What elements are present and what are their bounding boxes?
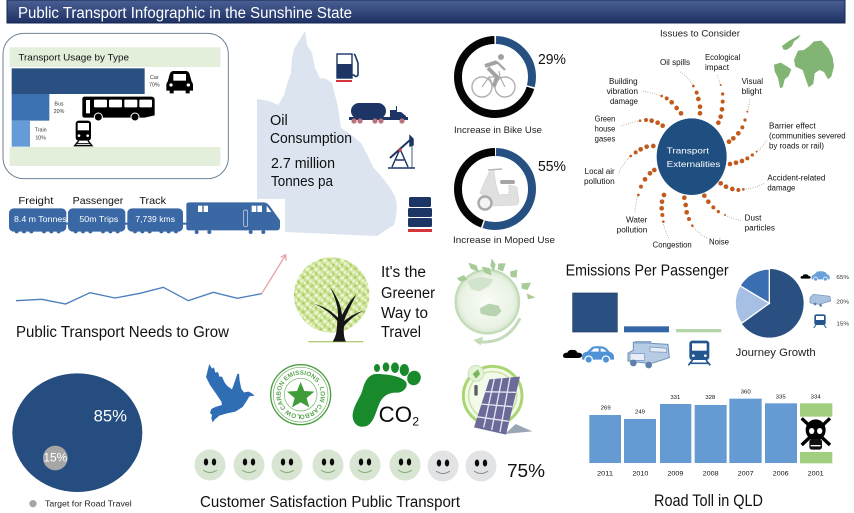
spoke labels: Congestion [653,241,692,250]
icon: legend bus [810,294,831,307]
icon: tanker truck [349,103,408,124]
chart: journey growth pie [735,269,849,359]
spoke labels: Dust [745,213,762,222]
chart: road toll bars [589,390,832,478]
title banner: Public Transport Infographic in the Sunshine State [18,5,352,22]
chart: moped use donut [453,152,566,246]
chart: public transport growth line [16,255,286,304]
spoke labels: Noise [709,237,730,246]
chart: road toll bars: 2009 [667,471,684,478]
chart: moped use donut: Increase in Moped Use [453,235,555,246]
icon: locomotive [186,202,280,234]
heading: customer satisfaction: Customer Satisfaction Public Transport [200,494,461,511]
chart: road toll bars: 2001 [808,471,824,478]
icon: moped [478,169,519,210]
hub circle: Externalities [667,159,721,169]
text: greener way to travel: Way to [381,305,428,322]
text: greener way to travel: It's the [381,264,426,281]
chart: journey growth pie: 15% [836,322,849,328]
chart: moped use donut: 55% [538,158,566,175]
spoke labels: gases [595,135,615,144]
chart: road toll bars: 249 [635,410,645,416]
icon: cloud and car [563,346,614,363]
icon: skull and crossbones [802,418,830,450]
icon: black bus [82,97,155,121]
satisfaction smileys [194,450,545,482]
icon: low carbon stamp: LOW CARBON EMISSIONS . LOW CARBON EMISSIONS [276,370,326,420]
panel: Queensland map oil consumption: Oil [270,113,288,129]
chart: road toll bars: 2011 [597,471,613,478]
panel: freight train: 8.4 m Tonnes [14,214,67,224]
satisfaction smileys: 75% [507,460,545,481]
chart: road toll bars: 335 [776,394,786,400]
spoke labels: Barrier effect [769,122,816,131]
panel: transport usage by type: Train [35,128,47,134]
text: greener way to travel: Travel [381,324,421,341]
hub circle [657,118,727,195]
chart: road toll bars: 269 [601,406,611,412]
icon: low carbon stamp [270,364,332,426]
panel: Queensland map oil consumption: Consumption [270,131,352,147]
chart: road toll bars: 334 [811,394,821,400]
spoke labels: vibration [607,87,638,96]
icon: cyclist [472,54,515,97]
panel: Queensland map oil consumption: Tonnes pa [271,174,334,190]
spoke labels: (communities severed [769,132,846,141]
chart: emissions per passenger: Emissions Per Passenger [566,263,729,280]
title banner [7,0,845,23]
spoke labels: Visual [742,77,763,86]
chart: bike use donut: Increase in Bike Use [454,125,542,136]
icon: black car [166,71,193,93]
panel: transport usage by type: 70% [149,82,160,88]
chart: road toll bars: 331 [670,395,680,401]
chart: road travel target pie: Target for Road Travel [45,499,132,509]
panel: freight train: Freight [18,196,53,207]
icon: tree [294,257,369,342]
spoke labels: damage [610,97,639,106]
panel: transport usage by type: Transport Usage by Type [18,53,129,63]
spoke labels: Water [626,215,648,224]
spoke dots [618,72,767,238]
spoke labels: blight [742,87,762,96]
icon: fuel pump [336,54,358,82]
spoke labels: Local air [585,167,615,176]
icon: co2 footprint: 2 [412,414,419,428]
panel: transport externalities: Issues to Consider [660,29,740,39]
spoke labels: impact [705,63,730,72]
chart: road travel target pie: 85% [94,407,127,426]
chart: emissions per passenger [563,263,729,368]
panel: Queensland map oil consumption: 2.7 million [271,156,335,172]
spoke labels: pollution [584,177,615,186]
spoke labels: pollution [617,225,647,234]
icon: blue dove [206,364,255,422]
hub circle: Transport [667,146,710,156]
panel: transport usage by type: Bus [54,102,64,108]
chart: journey growth pie: 20% [836,299,849,305]
icon: oil barrel [408,197,432,232]
chart: road travel target pie: 15% [43,451,67,464]
heading: road toll: Road Toll in QLD [654,492,763,510]
icon: co2 footprint [353,362,423,428]
icon: oil pump jack [388,136,415,168]
chart: bike use donut: 29% [538,51,566,68]
chart: road travel target pie [12,373,142,509]
spoke labels: Green [595,115,615,124]
chart: road toll bars: 2006 [773,471,789,478]
icon: co2 footprint: CO [379,402,412,427]
text: greener way to travel: Greener [381,285,435,302]
icon: school bus [628,341,669,368]
icon: green earth [456,258,535,345]
chart: journey growth pie: 65% [836,275,849,281]
chart: road toll bars: 328 [705,395,715,401]
chart: road toll bars: 360 [741,390,751,396]
panel: freight train: 50m Trips [79,214,119,224]
text: greener way to travel [381,264,435,341]
panel: transport externalities [584,29,846,250]
spoke labels [584,53,846,250]
icon: legend train [814,314,826,328]
icon: world globe [774,35,834,88]
spoke labels: Building [609,77,638,86]
spoke labels: Oil spills [660,58,690,67]
panel: freight train: Passenger [73,196,124,207]
spoke labels: Accident-related [767,173,825,182]
spoke labels: by roads or rail) [769,142,824,151]
panel: freight train [9,196,280,234]
panel: freight train: Track [139,196,167,207]
spoke labels: house [595,125,616,134]
icon: solar panel [463,365,532,435]
panel: Queensland map oil consumption [257,31,397,236]
icon: black train [75,121,92,146]
chart: road toll bars: 2007 [738,471,754,478]
chart: road toll bars: 2008 [703,471,719,478]
heading: needs to grow: Public Transport Needs to Grow [16,324,229,341]
panel: freight train: 7,739 kms [135,214,176,224]
panel: transport usage by type: 20% [54,109,65,115]
arrow: growth [262,255,286,294]
spoke labels: Ecological [705,53,741,62]
spoke labels: particles [745,223,775,232]
icon: legend car [801,271,830,281]
spoke labels: damage [767,183,796,192]
chart: journey growth pie: Journey Growth [736,347,816,359]
panel: transport usage by type: 10% [35,135,46,141]
panel: transport usage by type: Car [150,75,159,81]
chart: bike use donut [454,40,566,136]
chart: road toll bars: 2010 [632,471,649,478]
panel: transport usage by type [3,33,228,179]
icon: blue train [688,341,710,365]
